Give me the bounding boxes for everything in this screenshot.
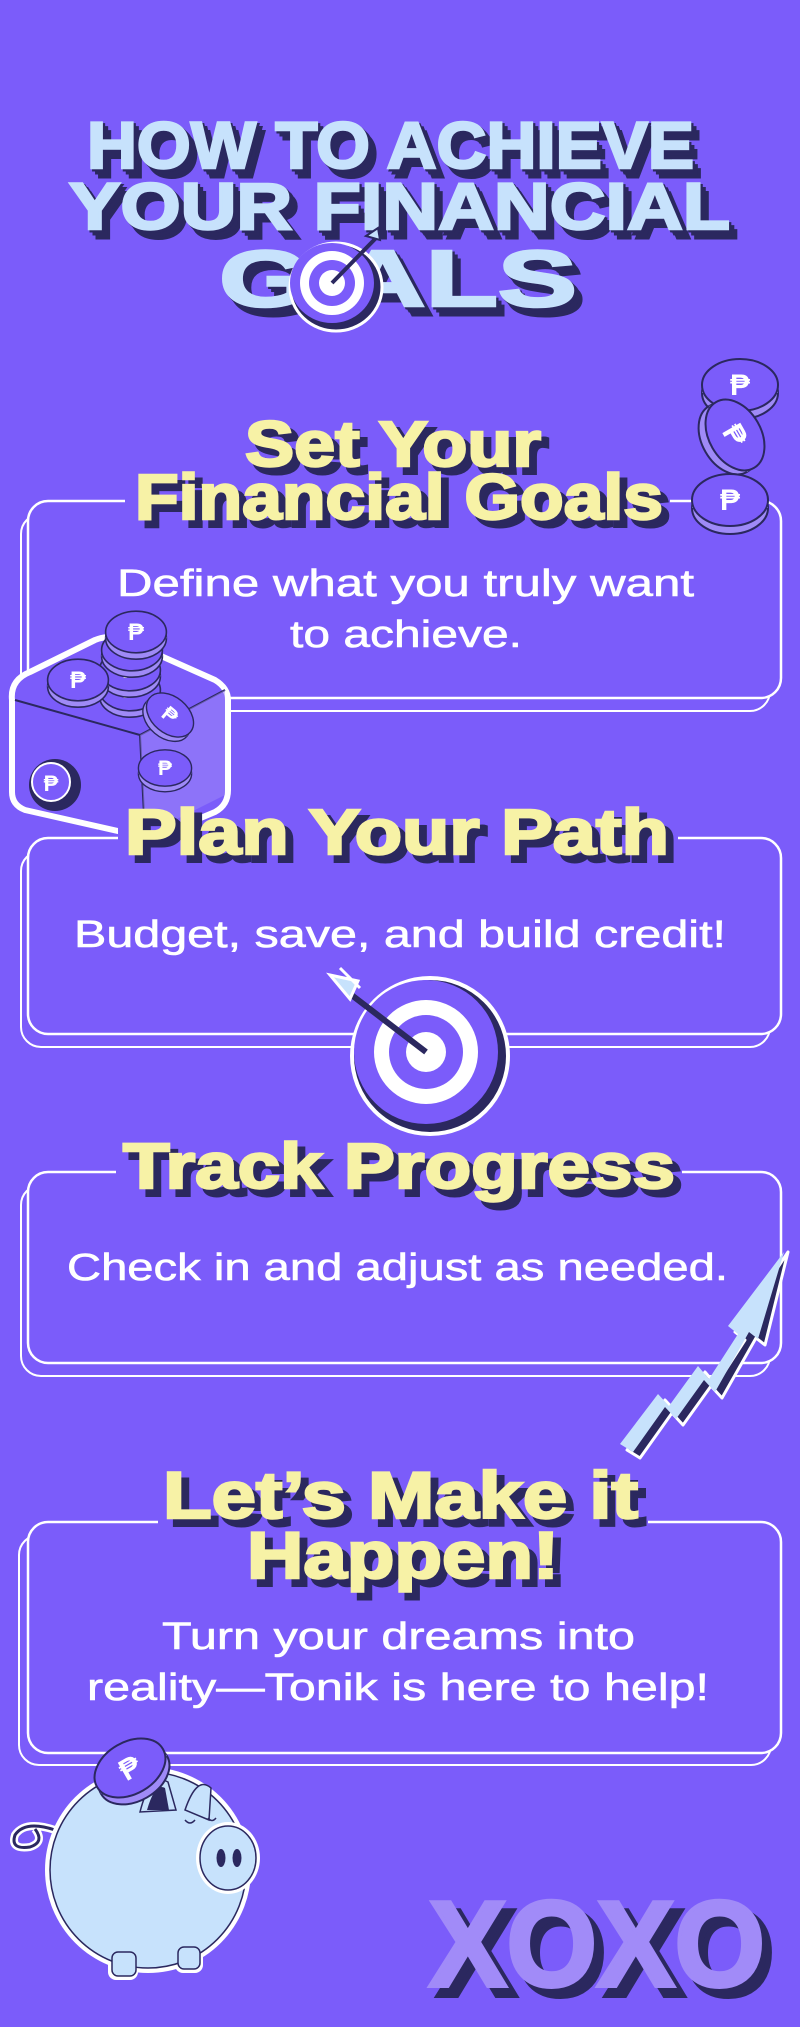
- icon: safe with coins: [12, 611, 228, 838]
- icon: safe with coins: ₱: [44, 771, 59, 796]
- text: define: to achieve.: [290, 614, 522, 656]
- heading: plan your path: Plan Your Path: [132, 803, 676, 875]
- panel: track progress: [21, 1130, 781, 1376]
- text: define: Define what you truly want: [117, 563, 695, 605]
- heading: let's make it happen: Happen!: [247, 1518, 559, 1592]
- text: define: [117, 563, 695, 656]
- heading: set your financial goals: Financial Goals: [135, 461, 663, 533]
- title: [69, 108, 738, 332]
- xoxo: XOXO: [429, 1876, 765, 2012]
- heading: track progress: Track Progress: [123, 1130, 675, 1202]
- text: budget: Budget, save, and build credit!: [74, 914, 726, 956]
- icon: title target: [290, 228, 382, 331]
- heading: set your financial goals: Set Your: [245, 408, 541, 480]
- heading: let's make it happen: [163, 1458, 645, 1599]
- text: turn your dreams: Turn your dreams into: [162, 1616, 635, 1658]
- panel: set your financial goals: [21, 408, 781, 711]
- heading: let's make it happen: Let’s Make it: [163, 1458, 638, 1532]
- icon: falling coins: [687, 359, 778, 534]
- heading: set your financial goals: Financial Goals: [142, 468, 670, 540]
- heading: let's make it happen: Let’s Make it: [170, 1465, 645, 1539]
- icon: target: [330, 968, 508, 1134]
- text: turn your dreams: [87, 1616, 709, 1709]
- heading: set your financial goals: Set Your: [252, 415, 548, 487]
- heading: set your financial goals: [135, 408, 670, 540]
- icon: growth arrow: [620, 1252, 788, 1458]
- heading: track progress: Track Progress: [130, 1137, 682, 1209]
- heading: let's make it happen: Happen!: [254, 1525, 566, 1599]
- panel: let's make it happen: [19, 1458, 781, 1765]
- text: turn your dreams: reality—Tonik is here to help!: [87, 1667, 709, 1709]
- xoxo: XOXO: [438, 1885, 774, 2021]
- icon: piggy bank: [14, 1726, 260, 1980]
- panel: plan your path: [21, 796, 781, 1047]
- heading: plan your path: Plan Your Path: [125, 796, 669, 868]
- text: check in: Check in and adjust as needed.: [67, 1247, 728, 1289]
